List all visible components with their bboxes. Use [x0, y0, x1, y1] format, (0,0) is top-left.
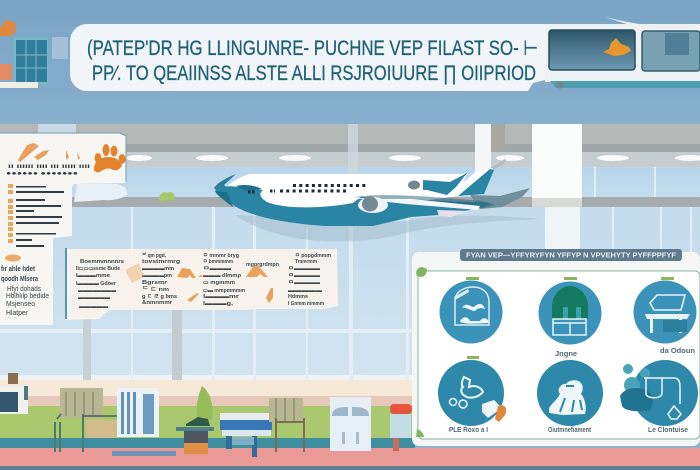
illustration: kiosk frame: [55, 388, 123, 452]
panel: horizontal info strip: ㅁ▬▬▬▬: [288, 266, 321, 272]
panel: horizontal info strip: Boemmmnnnrs: [80, 259, 124, 265]
icon: pets: [18, 143, 80, 162]
label: Oiutmnefiament: Oiutmnefiament: [548, 427, 592, 434]
terminal window wall: [0, 124, 700, 395]
checklist lines: [16, 186, 64, 247]
panel: horizontal info strip: I▬▬▬mr: [203, 294, 240, 300]
panel: horizontal info strip: I▬▬▬g,: [203, 301, 234, 307]
panel: pet info card: [0, 133, 127, 325]
panel: horizontal info strip: ▭ mgmmm: [203, 280, 235, 286]
panel: horizontal info strip: I Gnmm mmmm: [288, 301, 324, 307]
orange pet marks: [125, 263, 273, 303]
icon: pet care: [440, 277, 502, 344]
illustration: tree and gate: [176, 386, 214, 454]
icon: orange pet: [5, 254, 21, 262]
icon: seats: [634, 277, 696, 344]
icon: pet bath: [438, 356, 506, 426]
panel: horizontal info strip: mgprgrdmpn: [246, 262, 280, 268]
panel: pet info card: ●●●●●● ●●●●●●●: [6, 171, 79, 177]
lower card text: Hblhlılp bedide: [6, 293, 49, 300]
label: PLE Roxo a I: PLE Roxo a I: [449, 427, 488, 434]
header: left icon: [0, 20, 68, 88]
panel: horizontal info strip: I▬▬▬▬ Gdoer: [76, 281, 117, 287]
tail tip: [490, 159, 507, 171]
header: title banner: [70, 24, 545, 91]
lower card text: fır ahle hdet: [1, 266, 36, 273]
icon: water and carrier: [620, 360, 698, 426]
panel: horizontal info strip: &nmnmmr: [142, 300, 173, 306]
panel: horizontal info strip: ▬▬▬▬▬: [79, 304, 109, 310]
title text: PP⁄. TO QEAIINSS ALSTE ALLI RSJROIUURE ∏ OIIPRIOD: [92, 62, 536, 85]
tail fin: [447, 168, 493, 196]
panel: horizontal info strip: ㅁ popgdmmm: [295, 253, 331, 259]
wing: [354, 195, 496, 208]
illustration: left machine: [0, 373, 28, 414]
panel: horizontal info strip: g ㄷ ㄹ g bms: [142, 294, 177, 300]
airplane: [214, 159, 540, 241]
panel: horizontal info strip: ▬▬▬▬▬▬▬▬: [78, 288, 116, 294]
panel: horizontal info strip: ▬▬▬▬▬: [288, 288, 323, 294]
label: da Odoun: da Odoun: [660, 346, 695, 355]
nose fins: [214, 174, 236, 196]
icon: paw print: [94, 144, 126, 172]
white body: [228, 174, 467, 212]
label: Jngne: Jngne: [555, 349, 577, 358]
title text: (PATEP'DR HG LLINGUNRE- PUCHNE VEP FILAST SO- ⊢: [87, 37, 538, 60]
panel: horizontal info strip: ㅁ mmmr bryg: [203, 253, 239, 259]
panel: horizontal info strip: ▬▬▬▬pm: [142, 273, 172, 279]
lower card text: [1, 266, 49, 317]
panel: horizontal info strip: ㅁ▬▬▬: [203, 266, 232, 272]
panel: horizontal info strip: Tmmrmm: [295, 259, 317, 265]
reflection: [235, 215, 540, 241]
lower card text: Hfyt dohads: [7, 286, 41, 293]
lower fairing: [437, 210, 469, 217]
panel caption: ıı ıııııı ıııı ııı ııııı ıııı: [8, 164, 91, 170]
panel: horizontal info strip: ㅁ▬▬▬▬: [288, 280, 321, 286]
panel: horizontal info strip: tovstmrmrg: [142, 259, 180, 265]
green shrub on ledge: [159, 192, 175, 201]
icon: leaf corner: [416, 267, 427, 277]
illustration: second kiosk frame: [269, 398, 304, 452]
terminal columns: [475, 124, 582, 252]
panel: horizontal info strip: I▬▬▬mme: [76, 273, 110, 279]
title text: [87, 37, 538, 85]
lower card text: qoodh Mlsera: [1, 276, 38, 283]
illustration: white doors: [330, 397, 371, 451]
panel: horizontal info strip: ▬▬▬▬▬▬: [78, 295, 110, 301]
panel title bar: FYAN VEP—YFFYRYFYN YFFYP N VPVEHYTY PYFFPPFYF: [466, 252, 677, 260]
panel: horizontal info strip: ▬▬▬▬mm: [142, 266, 174, 272]
panel: horizontal info strip: ㅁ bmmmmm: [203, 259, 233, 265]
lower card text: Msjenseo: [6, 301, 35, 308]
panel: horizontal info strip: Bgrsmr: [142, 280, 168, 286]
terminal ceiling: [0, 124, 700, 167]
panel: horizontal info strip: Hdmms: [288, 294, 308, 300]
panel: horizontal info strip: ᄃ ㄷ nm: [142, 286, 169, 293]
teal lower body: [215, 186, 491, 226]
illustration: red sign kiosk: [390, 404, 412, 451]
windows: [293, 184, 367, 187]
illustration: glass booth: [112, 388, 176, 456]
icon: green dome: [538, 277, 602, 344]
icon: wash: [537, 360, 603, 426]
panel: horizontal info strip: ▬▬▬ dlmmp: [203, 273, 242, 279]
illustration: blue machine: [220, 413, 272, 457]
lower card text: Hlatper: [6, 310, 29, 317]
engines: [358, 197, 388, 213]
panel: horizontal info strip: ᄇ qm pgd,: [142, 251, 166, 259]
panel: horizontal info strip: [65, 248, 338, 320]
panel: horizontal info strip: ▭▬ mmpmmmm: [203, 288, 245, 294]
stabilizer: [423, 173, 467, 195]
ceiling lights: [126, 155, 700, 161]
panel title bar: [460, 249, 682, 261]
rear wing: [470, 188, 530, 209]
header: plane window screens: [545, 17, 700, 88]
label: Le Clontuise: Le Clontuise: [648, 427, 688, 434]
lower terminal wall and ground: [0, 380, 700, 470]
panel: icon services: [412, 249, 700, 446]
top header band: [0, 0, 700, 124]
panel: horizontal info strip: ll▭▭▭ssme Bude: [76, 266, 120, 272]
panel: horizontal info strip: ㅁ▬▬▬▬: [288, 273, 321, 279]
